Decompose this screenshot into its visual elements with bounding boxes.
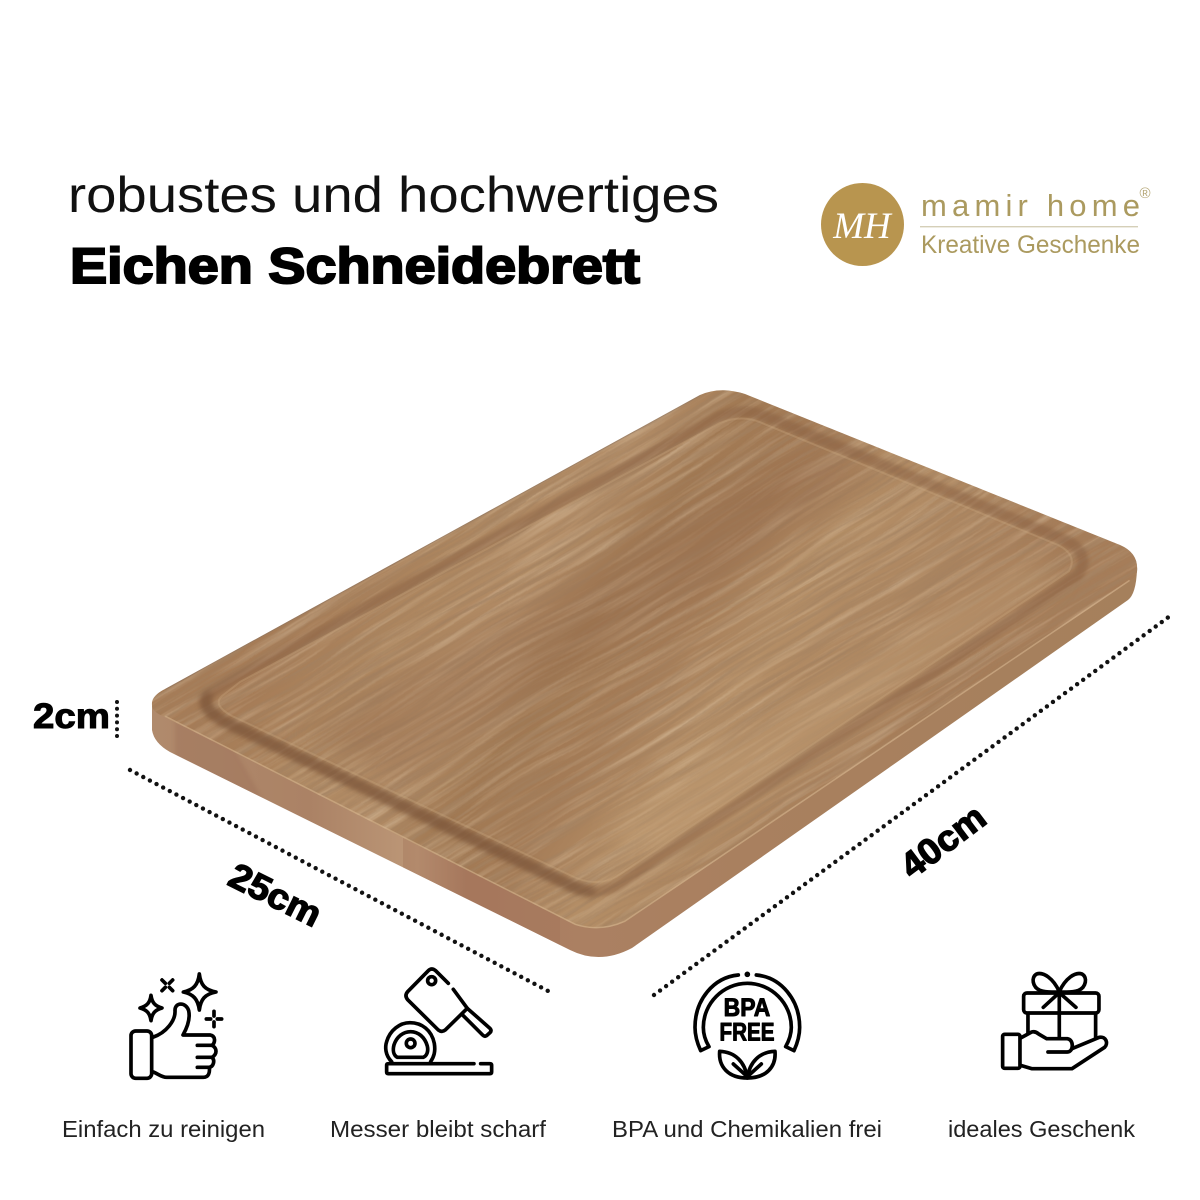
title: [68, 167, 719, 294]
dimension: 25cm: [130, 770, 548, 991]
title line 2: Eichen Schneidebrett: [70, 238, 640, 294]
logo: mamir home: [821, 183, 1151, 266]
logo badge: [821, 183, 904, 266]
icon: BPA free: [695, 973, 800, 1078]
back edge shadow: [165, 395, 700, 689]
dimension: 2cm: 2cm: [33, 697, 110, 736]
feature label: ideal gift: ideales Geschenk: [948, 1116, 1135, 1142]
logo tagline: Kreative Geschenke: [921, 231, 1140, 259]
board top surface: [152, 390, 1138, 928]
juice groove: [205, 412, 1083, 892]
front edge highlight: [165, 581, 1130, 928]
light plank band: [632, 568, 1042, 843]
dark plank band: [321, 452, 873, 776]
icon: thumbs up with sparkles: [131, 974, 222, 1078]
feature label: knife stays sharp: Messer bleibt scharf: [330, 1116, 547, 1142]
dimension: 25cm: 25cm: [222, 854, 328, 935]
dimension: 40cm: [654, 616, 1170, 995]
cutting board: [152, 390, 1138, 957]
registered mark: ®: [1139, 185, 1151, 202]
icon: gift on hand: [1003, 974, 1107, 1069]
feature label: easy to clean: Einfach zu reinigen: [62, 1116, 265, 1142]
logo wordmark: mamir home: [921, 188, 1140, 223]
title line 1: robustes und hochwertiges: [68, 167, 719, 223]
board side faces: [150, 560, 1140, 965]
dimension: 40cm: 40cm: [892, 796, 993, 886]
icon: cleaver and meat: [386, 969, 492, 1074]
icon: BPA free: FREE: [719, 1020, 774, 1047]
icon: BPA free: BPA: [724, 995, 770, 1022]
feature label: BPA and chemical free: BPA und Chemikalien frei: [612, 1116, 882, 1142]
logo badge: MH: [832, 206, 893, 247]
